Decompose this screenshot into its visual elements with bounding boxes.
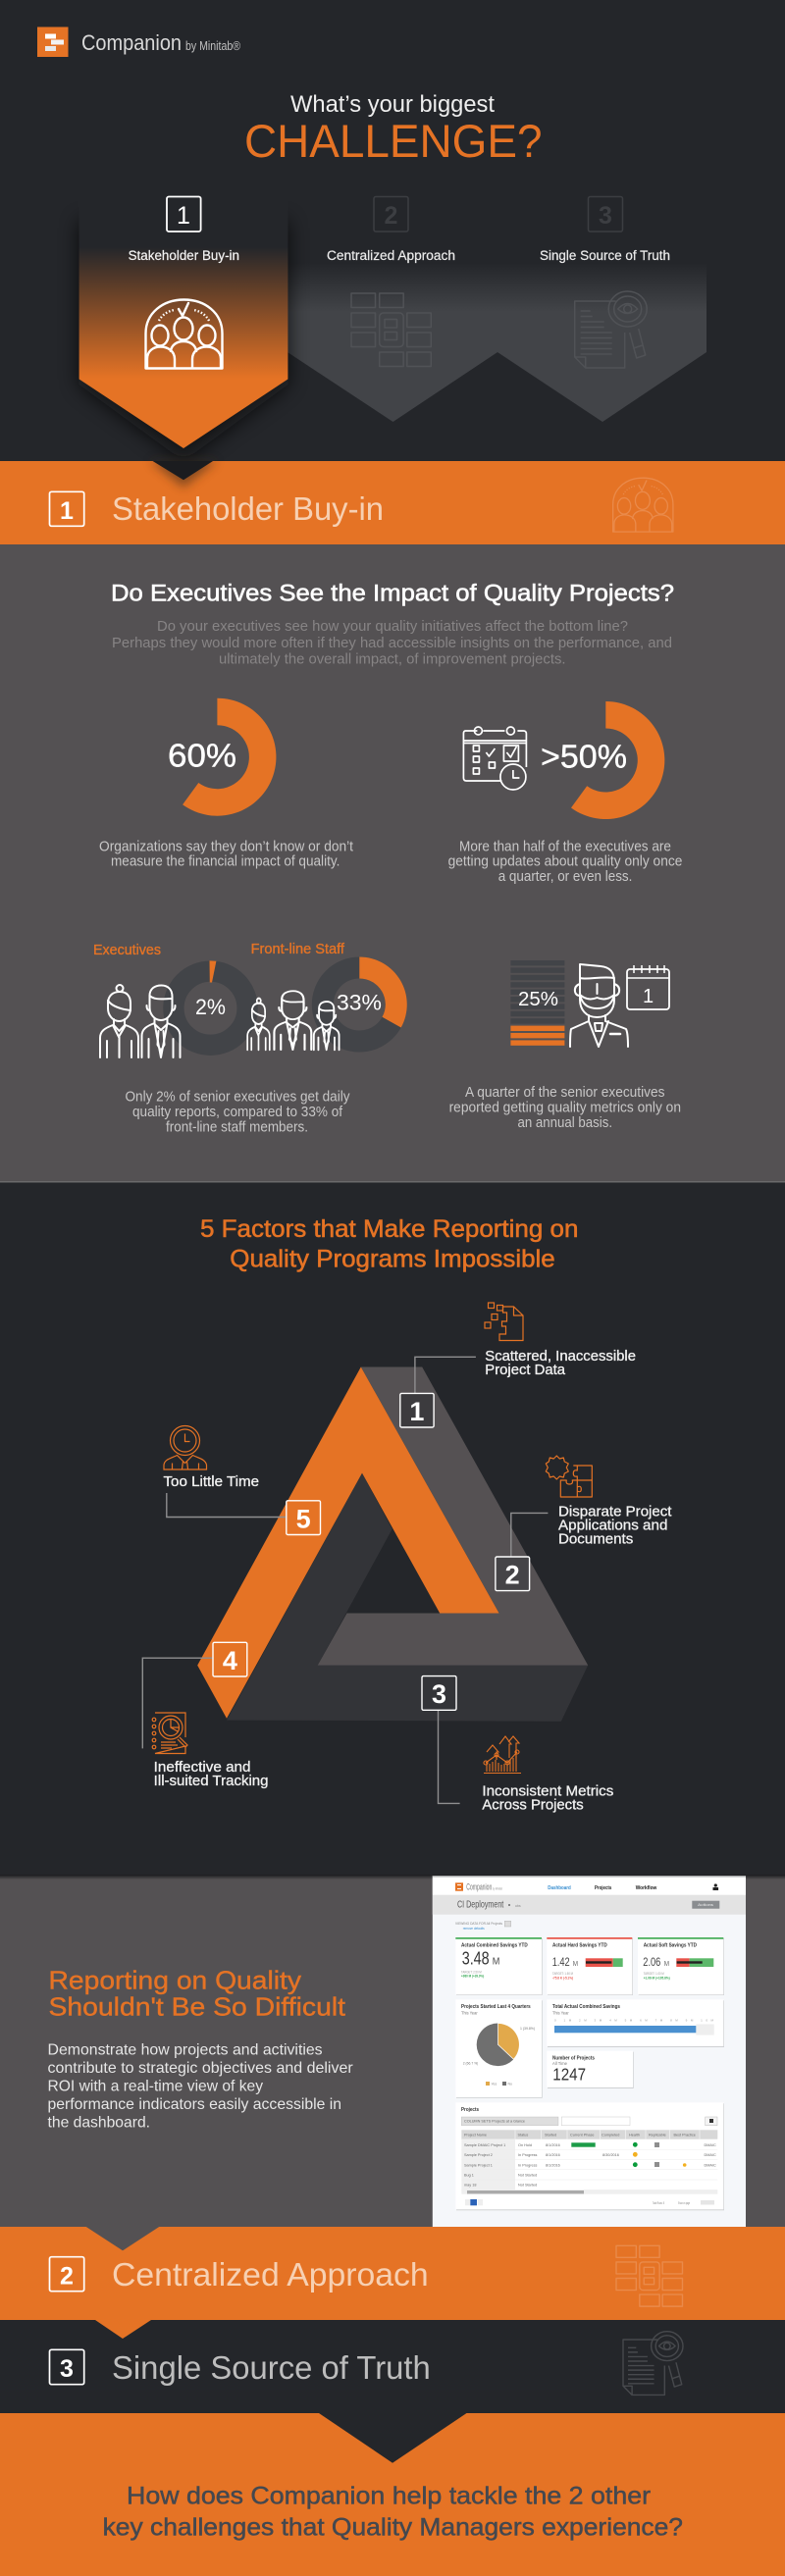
projects table card: Sample Project 2 (464, 2153, 493, 2157)
intro paragraph: ultimately the overall impact, of improvement projects. (219, 651, 565, 667)
badge 5 (287, 1501, 320, 1534)
projects table card: Started (545, 2133, 556, 2137)
icon: puzzle and gear (546, 1456, 592, 1497)
badge 3 (422, 1676, 456, 1710)
tab: Stakeholder Buy-in (active): 1 (177, 202, 190, 230)
pie card: 2 (66.7 %) (463, 2062, 478, 2066)
closing question: key challenges that Quality Managers experience? (103, 2513, 683, 2541)
caption: 25%: an annual basis. (518, 1115, 612, 1131)
icon: calendar with 1: 1 (643, 986, 654, 1007)
pie card: 1 (39.8%) (520, 2027, 535, 2031)
badge 2 (496, 1557, 530, 1591)
icon: calendar with checklist and clock (463, 727, 526, 790)
section bar 3: Single Source of Truth: Single Source of Truth (112, 2349, 431, 2386)
label: Inconsistent Metrics Across Projects: Inconsistent Metrics (482, 1784, 613, 1800)
tab: Stakeholder Buy-in (active): Stakeholder Buy-in (129, 248, 239, 263)
label: Ineffective and Ill-suited Tracking: Ineffective and (154, 1760, 251, 1776)
projects table card: may 18 (464, 2184, 476, 2188)
bar card: This Year (552, 2011, 569, 2015)
section bar 3: Single Source of Truth (0, 2320, 785, 2413)
tab: Centralized Approach: Centralized Approach (327, 248, 455, 263)
label: Disparate Project Applications and Documents (558, 1505, 671, 1548)
bar card: 0 1M 2M 3M 4M 5M 6M 7M 8M 9M 10M (554, 2019, 714, 2023)
pie card: Projects Started Last 4 Quarters (461, 2004, 531, 2010)
dashboard nav: Workflow (636, 1885, 657, 1891)
projects table card: COLUMN SETS Projects at a Glance (464, 2120, 525, 2124)
section bar 3: Single Source of Truth: 3 (60, 2355, 74, 2383)
projects table card: In Progress (518, 2153, 538, 2157)
dashboard nav: Companion (466, 1881, 492, 1891)
icon: staff people (247, 991, 340, 1050)
stat: >50% donut (541, 701, 664, 819)
caption: 2% vs 33%: Only 2% of senior executives get daily (126, 1090, 350, 1106)
section bar 1: Stakeholder Buy-in: 1 (60, 497, 74, 525)
section bar 2: Centralized Approach: Centralized Approach (112, 2256, 429, 2293)
dashboard nav: Dashboard (548, 1885, 571, 1891)
KPI card: combined savings (455, 1937, 543, 1995)
projects table card: DMAIC (705, 2164, 716, 2168)
projects table card: Status (518, 2133, 528, 2137)
KPI card: hard savings: TARGET: 1.50 M (552, 1972, 573, 1976)
pie card (455, 1999, 543, 2098)
tab: Single Source of Truth (497, 196, 706, 422)
caption: 25% (449, 1085, 681, 1131)
projects table card: On Hold (518, 2143, 532, 2147)
tab: Centralized Approach: 2 (385, 202, 397, 230)
projects table card: 8/30/2016 (602, 2153, 619, 2157)
section bar 1: Stakeholder Buy-in (0, 461, 785, 544)
caption: 25%: A quarter of the senior executives (465, 1085, 665, 1101)
label: Ineffective and Ill-suited Tracking: Ill-suited Tracking (154, 1774, 269, 1789)
label: Scattered, Inaccessible Project Data (485, 1349, 636, 1378)
badge 4 (213, 1642, 247, 1676)
body text: the dashboard. (47, 2115, 150, 2132)
projects table card: Projects (461, 2107, 479, 2113)
number card (547, 2051, 634, 2088)
projects table card: Completed (602, 2133, 619, 2137)
KPI card: soft savings: Actual Soft Savings YTD (644, 1942, 697, 1948)
background: header (0, 0, 785, 461)
KPI card: combined savings: +980 M (+39.9%) (461, 1974, 484, 1978)
body text: ROI with a real-time view of key (47, 2079, 263, 2095)
KPI card: hard savings: Actual Hard Savings YTD (552, 1942, 607, 1948)
badge 4: 4 (223, 1646, 237, 1675)
dashboard nav: Actions (698, 1902, 713, 1907)
KPI card: hard savings: M (573, 1961, 578, 1968)
label: Disparate Project Applications and Documents: Documents (558, 1532, 633, 1548)
dashboard nav: Projects (595, 1885, 611, 1891)
KPI card: hard savings (547, 1937, 633, 1995)
logo: Companion by Minitab: by Minitab® (185, 39, 241, 53)
projects table card: Sample Project 1 (464, 2164, 493, 2168)
caption: >50% (448, 839, 682, 885)
body text: Demonstrate how projects and activities (47, 2041, 323, 2058)
pie card: This Year (461, 2011, 478, 2015)
chart: executives 2% donut: Executives (93, 942, 161, 958)
logo: Companion by Minitab (37, 27, 241, 57)
projects table card: Health (629, 2133, 640, 2137)
icon: metrics chart (484, 1736, 521, 1774)
projects table card: Bug 1 (464, 2174, 474, 2178)
projects table card: Not Started (518, 2184, 537, 2188)
intro paragraph: Perhaps they would more often if they had accessible insights on the performance, and (112, 635, 672, 651)
caption: >50%: getting updates about quality only once (448, 854, 682, 870)
caption: 60% (99, 839, 353, 870)
KPI card: combined savings: 3.48 (462, 1949, 490, 1969)
chart: executives 2% donut (93, 942, 247, 1045)
projects table card (455, 2102, 724, 2210)
projects table card: Not Started (518, 2174, 537, 2178)
KPI card: soft savings: +1.06 M (+105.8%) (644, 1976, 670, 1980)
logo: Companion by Minitab: Companion (81, 30, 182, 55)
icon: calendar with 1 (627, 965, 669, 1009)
dashboard screenshot (433, 1876, 746, 2227)
title: What’s your biggest (290, 91, 495, 118)
label: Disparate Project Applications and Documents: Disparate Project (558, 1505, 671, 1520)
chart: executives 2% donut: 2% (195, 995, 226, 1019)
caption: 60%: Organizations say they don’t know or don’t (99, 839, 353, 854)
dashboard nav (455, 1881, 719, 1931)
tab: Stakeholder Buy-in (active) (79, 196, 288, 461)
label: Too Little Time: Too Little Time (163, 1474, 259, 1490)
KPI card: soft savings (638, 1937, 724, 1995)
body text: performance indicators easily accessible in (47, 2096, 341, 2113)
diagram: impossible triangle (197, 1367, 588, 1722)
stat: 60% donut: 60% (168, 738, 236, 774)
KPI card: hard savings: -75.8 K (-5.1%) (552, 1976, 573, 1980)
KPI card: soft savings: 2.06 (643, 1957, 660, 1969)
KPI card: soft savings: TARGET: 1.00 M (644, 1972, 664, 1976)
stat: >50% donut: >50% (541, 739, 627, 775)
closing question: How does Companion help tackle the 2 other (127, 2483, 651, 2510)
icon: executives people (100, 985, 181, 1057)
body text (47, 2041, 353, 2132)
panel: executives grey section (0, 544, 785, 1183)
heading (49, 1966, 346, 2022)
bar card (547, 1999, 724, 2047)
label: Inconsistent Metrics Across Projects (482, 1784, 613, 1813)
heading: Quality Programs Impossible (230, 1245, 555, 1272)
number card: 1247 (552, 2064, 586, 2084)
chart: front-line staff 33% donut: Front-line Staff (251, 941, 345, 957)
caption: 2% vs 33%: quality reports, compared to 33% of (132, 1105, 343, 1120)
closing panel (0, 2413, 785, 2576)
caption: 60%: measure the financial impact of quality. (111, 854, 340, 870)
caption: 2% vs 33%: front-line staff members. (166, 1119, 308, 1135)
projects table card: Project Name (464, 2133, 487, 2137)
caption: >50%: a quarter, or even less. (498, 869, 632, 885)
label: Inconsistent Metrics Across Projects: Across Projects (482, 1797, 584, 1813)
tab: Centralized Approach (288, 196, 497, 422)
KPI card: combined savings: Actual Combined Savings YTD (461, 1942, 528, 1948)
dashboard nav: by Minitab (493, 1885, 502, 1891)
badge 1: 1 (409, 1397, 424, 1426)
badge 5: 5 (296, 1504, 311, 1533)
projects table card: Replicable (649, 2133, 666, 2137)
badge 2: 2 (505, 1560, 520, 1589)
icon: bearded executive (570, 964, 628, 1047)
pie card: No (508, 2082, 512, 2086)
stat: 60% donut (168, 698, 276, 816)
heading (200, 1215, 578, 1272)
projects table card: Sample DMAIC Project 1 (464, 2143, 505, 2147)
section bar 1: Stakeholder Buy-in: Stakeholder Buy-in (112, 490, 384, 527)
KPI card: combined savings: TARGET: 2.50 M (461, 1970, 482, 1974)
chart: 25% stripes (510, 960, 564, 1046)
KPI card: soft savings: M (664, 1961, 669, 1968)
title (244, 91, 542, 167)
caption: 25%: reported getting quality metrics only on (449, 1100, 681, 1115)
number card: Number of Projects (552, 2056, 595, 2062)
heading: 5 Factors that Make Reporting on (200, 1215, 578, 1243)
badge 1 (400, 1393, 434, 1427)
projects table card: 8/1/2016 (546, 2164, 560, 2168)
title: CHALLENGE? (244, 115, 542, 167)
number card: All Time (552, 2061, 567, 2066)
heading: Reporting on Quality (49, 1966, 301, 1995)
section bar 2: Centralized Approach: 2 (60, 2262, 74, 2290)
section bar 2: Centralized Approach (0, 2227, 785, 2320)
panel: 5 factors dark section (0, 1183, 785, 1876)
KPI card: hard savings: 1.42 (552, 1957, 570, 1969)
projects table card: Current Phase (570, 2133, 594, 2137)
tab: Single Source of Truth: 3 (599, 202, 612, 230)
icon: scattered data (485, 1303, 523, 1340)
projects table card: 8/1/2016 (546, 2153, 560, 2157)
chart: front-line staff 33% donut: 33% (337, 990, 382, 1014)
dashboard nav: VIEWING DATA FOR All Projects (455, 1922, 502, 1926)
chart: front-line staff 33% donut (251, 941, 407, 1042)
icon: clock person (164, 1426, 206, 1469)
caption: >50%: More than half of the executives are (459, 839, 671, 854)
chart: 25% stripes: 25% (518, 989, 558, 1010)
heading: Shouldn't Be So Difficult (49, 1992, 346, 2022)
dashboard nav: CI Deployment (457, 1899, 503, 1910)
projects table card: Best Practice (673, 2133, 696, 2137)
bar card: Total Actual Combined Savings (552, 2004, 620, 2010)
projects table card: DMAIC (705, 2153, 716, 2157)
leader lines (142, 1357, 548, 1803)
icon: tracking notebook (152, 1713, 187, 1754)
projects table card: Total Rows: 5 (653, 2201, 664, 2205)
panel: reporting section (0, 1875, 785, 2227)
label: Scattered, Inaccessible Project Data: Project Data (485, 1363, 566, 1378)
label: Scattered, Inaccessible Project Data: Scattered, Inaccessible (485, 1349, 636, 1365)
projects table card: In Progress (518, 2164, 538, 2168)
dashboard nav: remove defaults (463, 1927, 485, 1931)
dashboard nav: ubs (515, 1903, 521, 1908)
projects table card: Show on page (678, 2201, 690, 2205)
heading: Do Executives See the Impact of Quality Projects? (111, 581, 674, 607)
intro paragraph (112, 618, 672, 667)
KPI card: combined savings: M (493, 1957, 499, 1968)
pie card: Yes (491, 2082, 497, 2086)
body text: contribute to strategic objectives and deliver (47, 2060, 353, 2077)
tab: Single Source of Truth: Single Source of Truth (540, 248, 670, 263)
projects table card: DMAIC (705, 2143, 716, 2147)
label: Disparate Project Applications and Documents: Applications and (558, 1519, 667, 1534)
projects table card: 8/1/2016 (546, 2143, 560, 2147)
intro paragraph: Do your executives see how your quality initiatives affect the bottom line? (157, 618, 628, 635)
caption: 2% vs 33% (126, 1090, 350, 1135)
closing question (103, 2483, 683, 2541)
badge 3: 3 (432, 1679, 446, 1709)
label: Ineffective and Ill-suited Tracking (154, 1760, 269, 1789)
